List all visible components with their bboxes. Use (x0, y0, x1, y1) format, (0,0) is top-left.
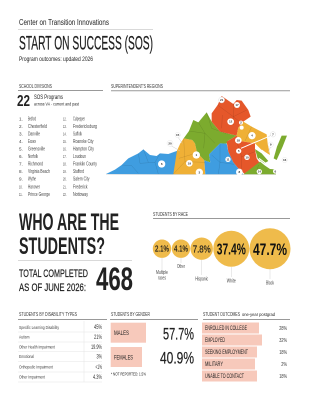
bar: enrolled in college (202, 322, 287, 334)
table rows: 4.3% (93, 375, 102, 381)
bar: unable to contact (202, 370, 287, 382)
region: northeast yellow (237, 122, 270, 155)
organization name: Center on Transition Innovations (19, 18, 109, 27)
region: central-east orange (227, 136, 260, 174)
list of divisions, column one: 11. (19, 192, 22, 197)
bar: military: MILITARY (205, 362, 223, 368)
program count label: across VA - current and past (34, 102, 80, 106)
heading: who are the students: WHO ARE THE (19, 209, 119, 236)
bubble: white: White (227, 278, 236, 284)
list of divisions, column one: 6. (19, 154, 23, 159)
subtitle: Program outcomes: updated 2026 (19, 56, 93, 63)
list of divisions, column two: Salem City (73, 177, 90, 183)
organization name (18, 18, 153, 30)
total completed label: AS OF JUNE 2026: (19, 282, 86, 294)
list of divisions, column one: Bedford (28, 116, 36, 122)
heading: gender: STUDENTS BY GENDER (111, 312, 150, 318)
program count label: SOS Programs (34, 95, 63, 101)
list of divisions, column one: 9. (19, 177, 23, 182)
region markers: 11 (226, 157, 230, 161)
table rows: Orthopedic Impairment (19, 364, 54, 370)
region markers: 19 (188, 161, 191, 165)
region markers (158, 97, 287, 176)
table rows: 3% (96, 354, 102, 360)
region markers: 9 (270, 143, 272, 147)
bubble: multiple races: 2.1% (155, 244, 169, 254)
region markers: 8 (238, 170, 240, 174)
bar: unable to contact: 18% (279, 374, 287, 380)
list of divisions, column one: Norfolk (28, 154, 38, 160)
bar: seeking employment: SEEKING EMPLOYMENT (205, 350, 248, 356)
region markers: 15 (176, 133, 180, 137)
bubble: multiple races (153, 240, 171, 282)
region: tidewater green (255, 149, 268, 163)
leader lines (241, 137, 282, 163)
panel: superintendent's regions (106, 84, 290, 176)
region markers: 14 (258, 170, 261, 174)
table rows: Other Impairment (19, 374, 46, 380)
heading: outcomes: STUDENT OUTCOMES (203, 312, 240, 318)
bar: military (202, 358, 287, 370)
bar: employed: EMPLOYED (205, 338, 225, 344)
bubble: black: Black (266, 280, 274, 286)
list of divisions, column two: 13. (63, 124, 66, 129)
region markers: 7 (272, 132, 274, 136)
bubble: hispanic: 7.8% (193, 244, 211, 256)
table rows: <1% (96, 365, 102, 371)
title: START ON SUCCESS (SOS) (19, 34, 153, 54)
table rows: Other Health Impairment (19, 344, 56, 350)
total completed label: TOTAL COMPLETED (19, 268, 88, 280)
list of divisions, column two: 12. (63, 116, 66, 122)
bubble: other: Other (177, 264, 185, 270)
list of divisions, column one: Richmond (28, 162, 43, 168)
bar: unable to contact: UNABLE TO CONTACT (205, 374, 244, 380)
list of divisions, column one: Virginia Beach (28, 169, 50, 175)
list of divisions, column one: Chesterfield (28, 124, 47, 130)
bar: employed: 32% (279, 338, 287, 344)
list of divisions, column two: Loudoun (73, 154, 86, 160)
list of divisions, column one: Greensville (28, 147, 45, 153)
list of divisions, column two: 19. (63, 169, 66, 174)
panel: students by gender (110, 312, 198, 376)
heading: superintendent's regions: SUPERINTENDENT'S REGIONS (111, 84, 163, 90)
bubble: hispanic: Hispanic (195, 276, 209, 282)
region markers: 21 (220, 98, 224, 102)
list of divisions, column two: 22. (63, 192, 66, 197)
heading: school divisions: SCHOOL DIVISIONS (19, 84, 52, 90)
list of divisions, column two: Roanoke City (73, 139, 94, 145)
table rows (19, 325, 102, 381)
list of divisions, column one: Wythe (28, 177, 36, 183)
region markers: 1 (195, 153, 197, 157)
total completed number: 468 (96, 261, 133, 297)
county boundaries (122, 103, 262, 174)
bar: seeking employment (202, 346, 287, 358)
region markers: 17 (235, 103, 239, 107)
region markers: 10 (245, 155, 249, 159)
table rows: 19.9% (91, 345, 102, 351)
table rows: 21% (94, 335, 102, 341)
list of divisions, column two: 18. (63, 162, 66, 167)
bar: enrolled in college: 28% (279, 326, 287, 332)
region markers: 6 (161, 162, 163, 166)
list of divisions, column two: Suffolk (73, 132, 82, 138)
value: females: 40.9% (160, 348, 194, 368)
panel: students by race (153, 212, 290, 286)
region markers: 12 (229, 120, 233, 124)
region markers: 6 (274, 169, 276, 173)
list of divisions, column two: Fredericksburg (73, 124, 97, 130)
heading: who are the students (18, 209, 132, 260)
bar: seeking employment: 18% (279, 350, 287, 356)
list of divisions, column one: Hanover (28, 184, 40, 190)
region: northern orange (212, 96, 251, 136)
region: eastern shore green (274, 136, 287, 160)
table rows: 45% (94, 325, 102, 331)
leader lines (162, 258, 270, 279)
list of divisions, column one: 10. (19, 184, 22, 189)
bubble: black (250, 228, 290, 286)
bar: males: MALES (114, 330, 129, 337)
bubble: white (213, 231, 249, 284)
region markers: 20 (168, 141, 172, 145)
footnote: * NOT REPORTED: 1.5% (111, 372, 146, 376)
bar: employed (202, 334, 287, 346)
list of divisions, column two: Culpepper (73, 116, 85, 122)
table grid (18, 321, 102, 382)
bubble: other: 4.1% (174, 244, 188, 254)
table rows: Emotional (19, 354, 34, 359)
panel: students by disability types (18, 312, 107, 382)
map of Virginia (106, 96, 287, 176)
list of divisions, column one: 4. (19, 139, 23, 144)
region: south-central yellow (173, 138, 205, 174)
list of divisions, column two: Nottoway (73, 192, 88, 198)
region: central blue (204, 143, 243, 174)
list of divisions, column two: 14. (63, 132, 66, 136)
list of divisions, column one: Essex (28, 139, 36, 145)
region: north-central green (184, 112, 237, 162)
bubble: black: 47.7% (253, 240, 287, 259)
bar: females: FEMALES (114, 354, 133, 362)
list of divisions, column two: 16. (63, 147, 66, 152)
heading: who are the students: STUDENTS? (19, 233, 105, 260)
region markers: 2 (240, 121, 242, 125)
region: southwest blue (106, 149, 179, 174)
list of divisions, column two: 15. (63, 139, 66, 144)
list of divisions, column one: 3. (19, 132, 23, 136)
program count label (34, 95, 80, 106)
list of divisions, column two (63, 116, 97, 198)
list of divisions, column two: 20. (63, 177, 66, 182)
list of divisions, column two: 21. (63, 184, 66, 189)
list of divisions, column one: 7. (19, 162, 23, 167)
heading: outcomes (203, 312, 290, 320)
bubble: multiple races: races (158, 276, 166, 282)
region markers: 18 (237, 138, 240, 142)
heading: disability types: STUDENTS BY DISABILITY TYPES (19, 312, 77, 318)
table rows: Specific Learning Disability (19, 325, 60, 330)
list of divisions, column one: Prince George (28, 192, 50, 198)
list of divisions, column two: Stafford (73, 169, 84, 175)
list of divisions, column one: 2. (19, 124, 23, 129)
bubble: white: 37.4% (217, 242, 246, 258)
bubble: multiple races: Multiple (156, 270, 168, 276)
list of divisions, column one: 1. (19, 116, 23, 122)
region markers: 5 (238, 149, 240, 153)
list of divisions, column two: Franklin County (73, 162, 97, 168)
base line (106, 173, 276, 175)
total completed label (19, 268, 88, 294)
list of divisions, column one: 8. (19, 169, 23, 174)
region: southeast green (243, 162, 276, 174)
bar: military: 2% (281, 362, 287, 368)
region markers: 4 (251, 134, 253, 138)
list of divisions, column one: 5. (19, 147, 23, 152)
list of divisions, column one (19, 116, 50, 198)
bar: enrolled in college: ENROLLED IN COLLEGE (205, 326, 247, 332)
panel: school divisions (17, 84, 103, 198)
heading: students by race: STUDENTS BY RACE (153, 212, 188, 218)
program count: 22 (17, 93, 30, 110)
heading: outcomes: one-year postgrad (242, 312, 275, 318)
list of divisions, column one: Danville (28, 132, 40, 138)
bubble: other (172, 240, 190, 270)
list of divisions, column two: Frederick (73, 184, 88, 190)
bubble: hispanic (190, 238, 213, 282)
region markers: 3 (198, 170, 200, 174)
table rows: Autism (19, 334, 30, 340)
panel: student outcomes (202, 312, 290, 382)
value: males: 57.7% (163, 324, 194, 344)
list of divisions, column two: Hampton City (73, 147, 94, 153)
list of divisions, column two: 17. (63, 154, 66, 159)
region markers: 16 (283, 158, 287, 162)
